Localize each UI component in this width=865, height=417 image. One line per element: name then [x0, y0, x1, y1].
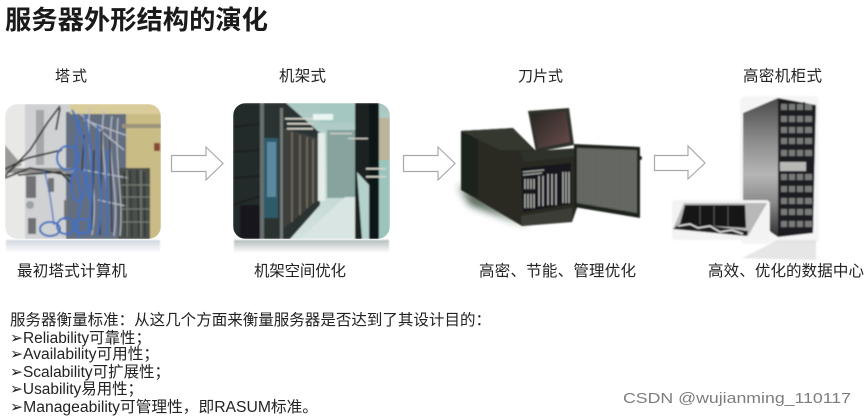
metric: manageability: ➢Manageability可管理性，即RASUM标准。	[10, 398, 318, 416]
arrow 2	[404, 147, 455, 180]
floor shadow	[458, 185, 530, 226]
text block: server metrics	[10, 311, 491, 416]
caption: rack: 机架空间优化	[254, 262, 346, 280]
cabinet side	[743, 98, 778, 237]
stage label: tower: 塔式	[55, 68, 87, 85]
dark gaps	[82, 130, 145, 237]
lower drive rows	[781, 174, 812, 227]
reflection: tower photo	[6, 240, 160, 253]
illustration: small blade enclosure	[672, 200, 770, 240]
keyboard shelf	[520, 148, 586, 162]
photo: rack server aisle	[233, 103, 390, 239]
watermark: CSDN @wujianming_110117	[623, 390, 851, 407]
backdrop	[740, 96, 819, 244]
illustration: high density cabinet	[740, 96, 819, 244]
reflection: cabinet	[742, 240, 816, 260]
chassis top	[461, 128, 532, 150]
blue cables	[40, 110, 108, 238]
stage label: rack: 机架式	[279, 67, 326, 85]
stage label: high density cabinet: 高密机柜式	[743, 67, 822, 85]
caption: tower: 最初塔式计算机	[17, 261, 127, 280]
caption: data center: 高效、优化的数据中心	[708, 262, 864, 280]
arrow 3	[654, 146, 705, 179]
illustration: blade chassis	[458, 108, 642, 226]
chassis side	[461, 128, 578, 226]
chassis base	[521, 208, 572, 226]
cabinet front	[778, 98, 816, 237]
open door	[574, 144, 640, 218]
caption: blade: 高密、节能、管理优化	[479, 262, 636, 280]
metric: availability: ➢Availability可用性；	[10, 345, 159, 363]
metric: usability: ➢Usability易用性；	[10, 380, 143, 398]
arrow 1	[172, 147, 223, 180]
upper drive rows	[781, 104, 812, 156]
monitor	[528, 108, 574, 152]
blade bay	[521, 163, 571, 212]
title: 服务器外形结构的演化	[5, 5, 268, 35]
stage label: blade: 刀片式	[518, 68, 563, 85]
metric: scalability: ➢Scalability可扩展性；	[10, 363, 170, 381]
black cables	[5, 106, 72, 184]
photo: tower servers with tangled cables	[5, 104, 161, 239]
grey cables	[78, 108, 128, 236]
reflection: rack photo	[234, 240, 389, 253]
metric: reliability: ➢Reliability可靠性；	[10, 329, 151, 347]
server fronts	[26, 110, 68, 234]
middle panel	[780, 162, 806, 171]
intro line: 服务器衡量标准：从这几个方面来衡量服务器是否达到了其设计目的：	[10, 311, 491, 329]
